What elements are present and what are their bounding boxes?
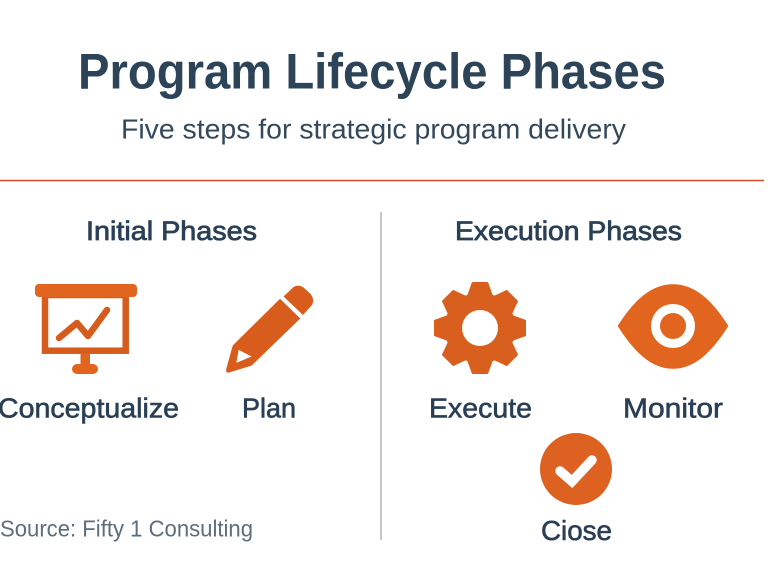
- source note: Source: Fifty 1 Consulting: [0, 516, 253, 542]
- title: Program Lifecycle Phases: [78, 44, 666, 100]
- heading: initial phases: Initial Phases: [86, 216, 257, 246]
- icon: pencil: [226, 286, 313, 372]
- label: close: Ciose: [541, 515, 612, 546]
- icon: gear: [434, 282, 526, 374]
- icon: check circle: [540, 433, 612, 505]
- subtitle: Five steps for strategic program delivery: [121, 114, 626, 144]
- panel: initial phases: [0, 216, 313, 424]
- label: execute: Execute: [429, 392, 532, 424]
- panel: execution phases: [429, 216, 728, 546]
- label: conceptualize: Conceptualize: [0, 392, 179, 424]
- label: plan: Plan: [242, 392, 296, 424]
- label: monitor: Monitor: [623, 392, 723, 424]
- icon: presentation board: [35, 284, 137, 374]
- icon: eye: [618, 285, 728, 368]
- heading: execution phases: Execution Phases: [455, 216, 682, 246]
